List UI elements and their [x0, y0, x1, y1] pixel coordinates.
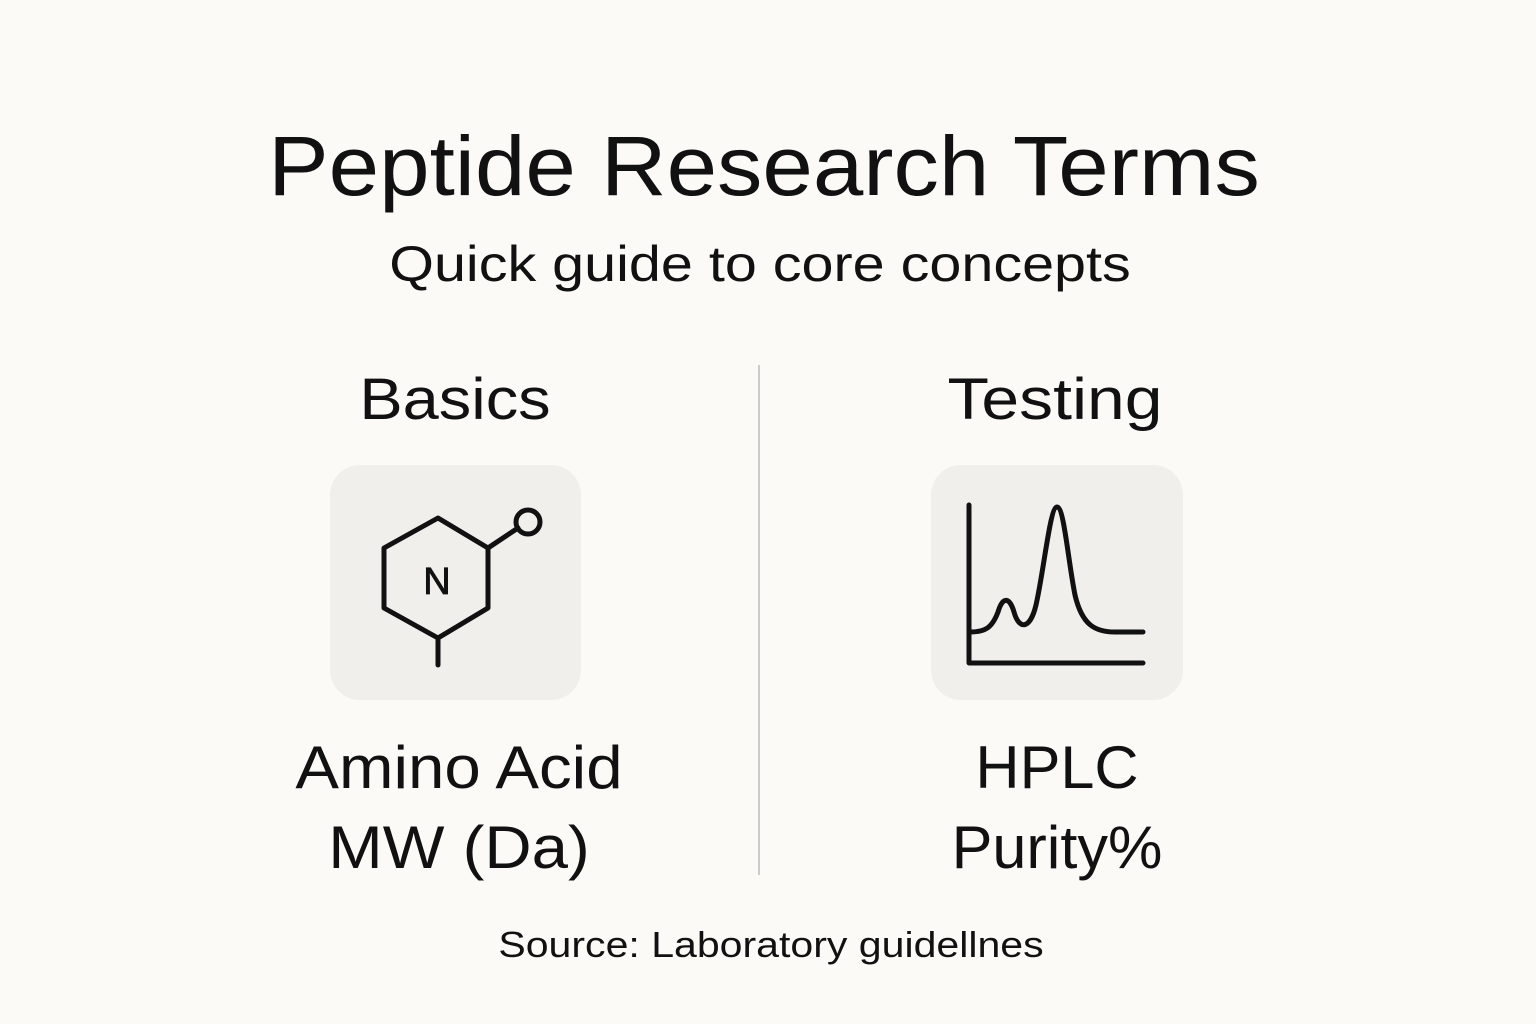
heading: Basics: Basics — [359, 367, 551, 432]
subtitle: Quick guide to core concepts — [389, 236, 1131, 292]
label: Amino Acid / MW (Da) — [295, 734, 623, 881]
label: Amino Acid / MW (Da): MW (Da) — [328, 814, 590, 881]
label: HPLC / Purity% — [952, 734, 1162, 881]
title: Peptide Research Terms — [268, 119, 1260, 213]
label: Amino Acid / MW (Da): Amino Acid — [295, 734, 623, 801]
icon box: amino acid — [330, 465, 581, 700]
source note: Source: Laboratory guidellnes — [498, 924, 1044, 965]
heading: Testing: Testing — [947, 367, 1163, 432]
icon box: HPLC chromatogram — [931, 465, 1183, 700]
label: HPLC / Purity%: HPLC — [975, 734, 1139, 801]
divider — [758, 365, 760, 875]
icon box: amino acid: N — [423, 561, 451, 603]
label: HPLC / Purity%: Purity% — [952, 814, 1162, 881]
